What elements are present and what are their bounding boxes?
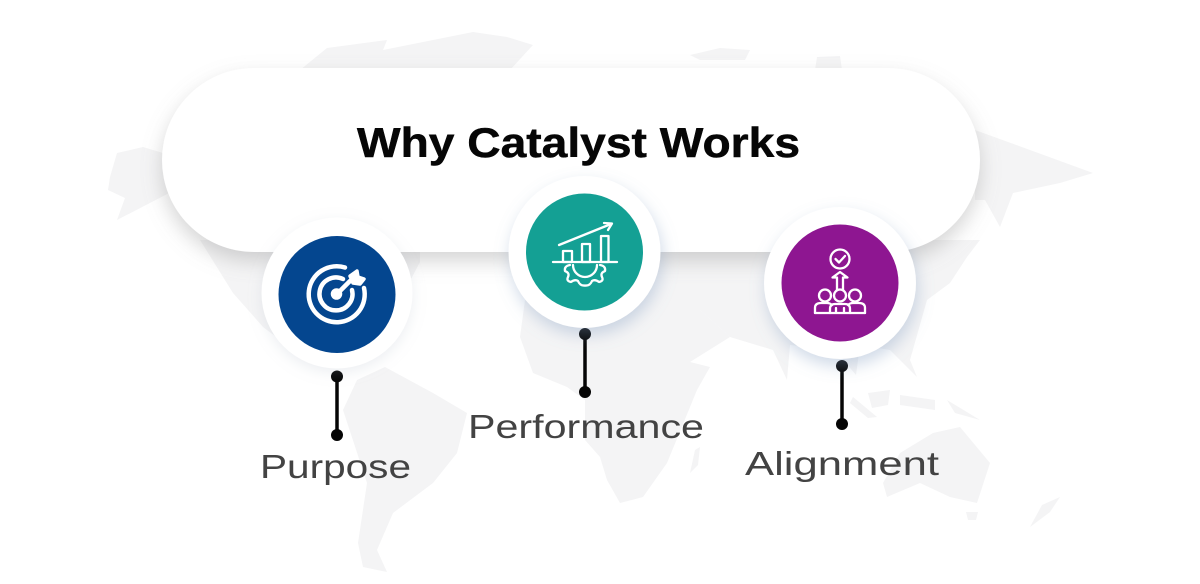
label: purpose: Purpose (260, 448, 411, 485)
title: Why Catalyst Works (357, 119, 800, 166)
title pill panel (162, 68, 980, 252)
connector: performance (579, 328, 591, 398)
label: performance: Performance (468, 408, 704, 445)
icon: team with upward arrow and check (815, 250, 865, 313)
connector: purpose (331, 370, 343, 441)
icon: target with arrow (309, 266, 365, 322)
badge: purpose (262, 218, 412, 368)
badge: alignment (764, 207, 916, 359)
connector: alignment (836, 360, 848, 430)
icon: bar chart on gear (553, 223, 617, 286)
label: alignment: Alignment (745, 445, 939, 482)
badge: performance (508, 176, 660, 328)
world map background (108, 32, 1093, 572)
